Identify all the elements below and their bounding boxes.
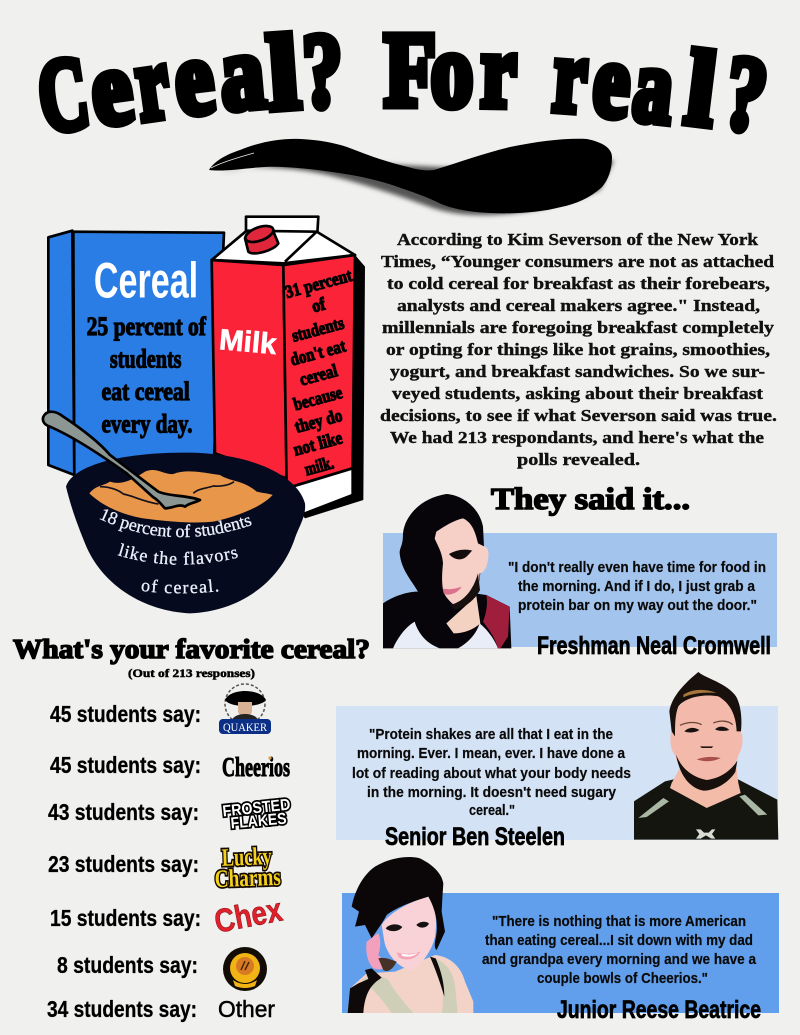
row: Cheerios: Cheerios: [222, 752, 290, 782]
milk carton text: of: [309, 293, 328, 316]
bowl text: like the flavors: [118, 542, 238, 565]
row: other: Other: [218, 996, 275, 1022]
row: Frosted Flakes: 43 students say:: [48, 799, 199, 825]
photo: Ben Steelen: [634, 672, 778, 840]
row: other: 34 students say:: [47, 996, 197, 1022]
row: Chex: Chex: [211, 890, 286, 940]
intro text block: analysts and cereal makers agree." Instead,: [397, 296, 760, 315]
cereal texture lines: [100, 482, 234, 504]
panel: Reese Beatrice quote: [342, 857, 779, 1024]
title: F: [384, 10, 436, 128]
intro text block: decisions, to see if what Severson said was true.: [380, 406, 777, 425]
title: a: [628, 26, 679, 147]
milk carton text: don't eat: [288, 336, 348, 370]
quote: "Protein shakes are all that I eat in the: [369, 726, 613, 743]
row: Lucky Charms: 23 students say:: [48, 851, 199, 877]
bowl text: of cereal.: [142, 579, 218, 594]
row: Cheerios: [50, 752, 290, 782]
title: ?: [718, 33, 774, 155]
title: [31, 10, 774, 156]
milk carton text: Milk: [218, 323, 279, 361]
row: Quaker: QUAKER: [223, 720, 267, 734]
row: Frosted Flakes: [48, 797, 291, 832]
title: e: [168, 17, 220, 138]
row: Cheerios: 45 students say:: [50, 752, 201, 778]
milk carton text: cereal: [297, 360, 340, 389]
milk carton text: not like: [291, 427, 345, 460]
row: Chex: [50, 890, 286, 940]
quote: morning. Ever. I mean, ever. I have done a: [357, 745, 626, 762]
bowl text: 18 percent of students: [100, 509, 252, 538]
row: Lucky Charms: Charms: [214, 864, 281, 893]
milk carton text: because: [291, 382, 345, 414]
milk carton text: they do: [293, 405, 344, 437]
milk carton text: [218, 265, 354, 479]
name: Senior Ben Steelen: [385, 823, 565, 851]
intro text block: According to Kim Severson of the New York: [397, 230, 759, 249]
cereal box text: eat cereal: [101, 376, 190, 406]
panel: Neal Cromwell quote: [383, 494, 777, 660]
quote: protein bar on my way out the door.": [518, 597, 757, 614]
quote: [482, 913, 757, 987]
heading: favorite cereal: (Out of 213 responses): [128, 666, 255, 680]
intro text block: to cold cereal for breakfast as their forebears,: [387, 274, 770, 293]
title: a: [215, 13, 269, 134]
milk carton text: 31 percent: [283, 265, 354, 302]
title: ?: [301, 12, 345, 130]
quote: the morning. And if I do, I just grab a: [518, 578, 756, 595]
milk carton: [212, 217, 365, 518]
row: Lucky Charms: Lucky: [221, 843, 273, 872]
title: r: [550, 15, 591, 135]
cereal box text: [87, 253, 207, 439]
row: Quaker: [50, 684, 271, 734]
row: Frosted Flakes: FROSTED: [222, 797, 291, 821]
title: l: [680, 29, 722, 149]
illustration: cereal box, milk carton and bowl: [42, 215, 365, 614]
title: e: [83, 27, 139, 149]
title: r: [480, 12, 517, 130]
quote: couple bowls of Cheerios.": [537, 970, 708, 987]
intro text block: Times, “Younger consumers are not as attached: [381, 252, 775, 271]
title: o: [431, 11, 473, 129]
title: r: [128, 22, 176, 143]
row: honey nut badge: 8 students say:: [57, 952, 198, 978]
intro text block: polls revealed.: [517, 450, 640, 469]
photo: Reese Beatrice: [348, 857, 473, 1013]
intro text block: [380, 230, 777, 469]
intro text block: We had 213 respondants, and here's what the: [390, 428, 765, 447]
quote: "There is nothing that is more American: [492, 913, 746, 930]
intro text block: millennials are foregoing breakfast completely: [382, 318, 775, 337]
cereal box text: every day.: [101, 409, 192, 439]
quote: than eating cereal...I sit down with my dad: [485, 932, 753, 949]
heading: favorite cereal: What's your favorite cereal?: [13, 634, 370, 664]
bowl text: [100, 509, 252, 594]
spoon in bowl: [43, 412, 200, 508]
quote: [352, 726, 631, 819]
intro text block: or opting for things like hot grains, smoothies,: [386, 340, 770, 359]
cereal box text: Cereal: [94, 253, 198, 309]
title: e: [589, 22, 635, 141]
quote: in the morning. It doesn't need sugary: [367, 784, 617, 801]
icon: black spoon: [209, 139, 614, 215]
title: l: [264, 14, 303, 133]
row: Lucky Charms: [48, 843, 281, 893]
title: C: [31, 35, 96, 156]
quote: and grandpa every morning and we have a: [482, 951, 757, 968]
panel: Ben Steelen quote: [336, 672, 778, 851]
cereal bowl: [66, 453, 305, 613]
cereal box text: students: [110, 343, 181, 373]
cereal box: [48, 231, 224, 477]
row: Quaker: 45 students say:: [50, 701, 201, 727]
quote: cereal.": [469, 802, 515, 819]
list: cereal votes: [47, 684, 291, 1022]
intro text block: yogurt, and breakfast sandwiches. So we sur-: [390, 362, 765, 381]
intro text block: veyed students, asking about their breakfast: [392, 384, 763, 403]
heading: They said it: They said it...: [491, 481, 690, 516]
row: Frosted Flakes: FLAKES: [230, 811, 288, 832]
heading: favorite cereal: [13, 634, 370, 680]
row: Chex: 15 students say:: [50, 905, 201, 931]
cereal in bowl: [89, 470, 273, 523]
photo: Neal Cromwell: [383, 494, 511, 648]
quote: [508, 559, 766, 614]
cereal box text: 25 percent of: [87, 311, 207, 341]
milk carton text: students: [289, 313, 346, 346]
row: honey nut badge: [57, 947, 267, 991]
quote: "I don't really even have time for food in: [508, 559, 766, 576]
quote: lot of reading about what your body needs: [352, 765, 631, 782]
milk carton text: milk.: [302, 452, 336, 479]
